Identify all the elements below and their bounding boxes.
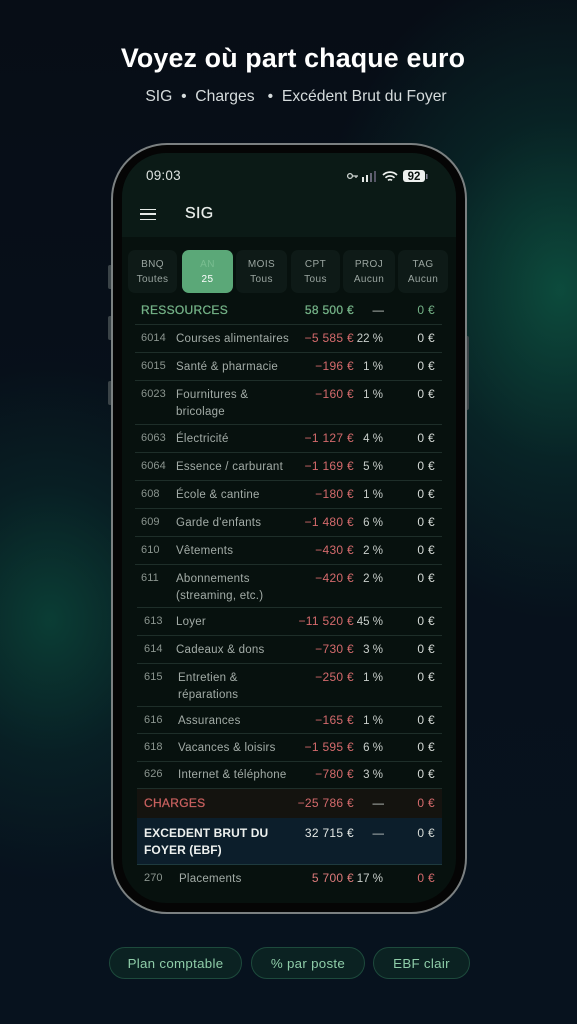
row 616: 616	[144, 714, 163, 726]
row 613	[144, 614, 435, 628]
resources row: 0 €	[417, 303, 435, 317]
row 614: Cadeaux & dons	[176, 644, 265, 656]
chip: EBF clair	[373, 947, 470, 979]
EBF values: EXCEDENT BRUT DU	[144, 826, 268, 840]
row 626: 626	[144, 768, 163, 780]
row 6023: 1 %	[363, 389, 383, 401]
row 6064: 6064	[141, 460, 166, 472]
app title: SIG	[185, 205, 213, 222]
row 6063	[141, 431, 435, 445]
charges values	[144, 796, 435, 810]
row 6063: 4 %	[363, 433, 383, 445]
row 270: 270	[144, 872, 163, 884]
row 6015	[141, 359, 435, 373]
status bar time: 09:03	[146, 168, 181, 183]
tab AN active: AN	[200, 259, 215, 270]
resources row: RESSOURCES	[141, 303, 228, 317]
row 611: −420 €	[315, 571, 354, 585]
row 6063: −1 127 €	[305, 431, 354, 445]
row 6015: 6015	[141, 360, 166, 372]
resources row	[141, 303, 435, 317]
row 608: 1 %	[363, 489, 383, 501]
EBF values	[144, 826, 435, 857]
charges row	[137, 789, 442, 818]
row 616: 1 %	[363, 715, 383, 727]
row 6064: 0 €	[417, 459, 435, 473]
table rows	[135, 324, 442, 789]
row 6023: −160 €	[315, 387, 354, 401]
row 6064: 5 %	[363, 461, 383, 473]
row 611: 0 €	[417, 571, 435, 585]
row 613: 45 %	[357, 616, 383, 628]
row 609: 6 %	[363, 517, 383, 529]
row 609: Garde d'enfants	[176, 517, 261, 529]
status bar icons	[347, 170, 428, 183]
row 270: 17 %	[357, 873, 383, 885]
row 6014: Courses alimentaires	[176, 333, 289, 345]
row 6064	[141, 459, 435, 473]
row 609: 0 €	[417, 515, 435, 529]
row 608: École & cantine	[176, 489, 260, 501]
row 610: 610	[141, 544, 160, 556]
row 613: Loyer	[176, 616, 206, 628]
EBF values: 32 715 €	[305, 826, 354, 840]
EBF band	[137, 818, 442, 865]
app header	[122, 153, 456, 237]
row 6014: −5 585 €	[305, 331, 354, 345]
row 613: −11 520 €	[298, 614, 354, 628]
row 6063: Électricité	[176, 433, 229, 445]
tab CPT: CPT	[305, 259, 326, 270]
row 613: 0 €	[417, 614, 435, 628]
row 618	[144, 740, 435, 754]
row 6015: 0 €	[417, 359, 435, 373]
row 611	[141, 571, 435, 602]
row 6064: Essence / carburant	[176, 461, 283, 473]
tab MOIS: MOIS	[248, 259, 275, 270]
row 610: −430 €	[315, 543, 354, 557]
tab TAG	[398, 250, 448, 293]
row 626: 0 €	[417, 767, 435, 781]
row 615: −250 €	[315, 670, 354, 684]
filter tabs	[128, 250, 448, 293]
row 616: −165 €	[315, 713, 354, 727]
row 616: 0 €	[417, 713, 435, 727]
row 608: 0 €	[417, 487, 435, 501]
row 611: Abonnements	[176, 573, 250, 585]
row 616	[144, 713, 435, 727]
status bar icons: 92	[408, 171, 420, 183]
chip: plan comptable: Plan comptable	[128, 956, 223, 971]
row 615: 0 €	[417, 670, 435, 684]
tab BNQ	[128, 250, 177, 293]
phone mockup	[108, 143, 469, 914]
resources row: 58 500 €	[305, 303, 354, 317]
row 6014	[141, 331, 435, 345]
row 6015: 1 %	[363, 361, 383, 373]
row 610	[141, 543, 435, 557]
row 6023: 0 €	[417, 387, 435, 401]
row 615: 1 %	[363, 672, 383, 684]
row 615: Entretien &	[178, 672, 238, 684]
charges values: CHARGES	[144, 796, 205, 810]
row 270	[144, 871, 435, 885]
EBF values: —	[372, 828, 384, 840]
row 6064: −1 169 €	[305, 459, 354, 473]
row 609: 609	[141, 516, 160, 528]
row 615	[144, 670, 435, 700]
row 626: Internet & téléphone	[178, 769, 287, 781]
tab CPT	[291, 250, 340, 293]
row 610: 2 %	[363, 545, 383, 557]
phone screen: FOYER (EBF)	[144, 843, 222, 857]
phone screen	[122, 153, 456, 903]
row 618: 618	[144, 741, 163, 753]
row 615: 615	[144, 671, 163, 683]
tab BNQ: BNQ	[141, 259, 164, 270]
table rows: bricolage	[176, 406, 225, 418]
row 618: 6 %	[363, 742, 383, 754]
menu icon	[140, 209, 156, 220]
row 614: −730 €	[315, 642, 354, 656]
charges values: —	[372, 798, 384, 810]
subtitle: SIG • Charges • Excédent Brut du Foyer	[145, 88, 447, 105]
row 610: 0 €	[417, 543, 435, 557]
row 6063: 6063	[141, 432, 166, 444]
row 610: Vêtements	[176, 545, 233, 557]
row 616: Assurances	[178, 715, 241, 727]
resources row: —	[372, 305, 384, 317]
power button	[466, 336, 469, 410]
row 618: Vacances & loisirs	[178, 742, 276, 754]
chip: % par poste: % par poste	[271, 956, 345, 971]
table rows: (streaming, etc.)	[176, 590, 263, 602]
tab BNQ: Toutes	[137, 274, 168, 285]
tab AN active	[182, 250, 233, 293]
tab PROJ: PROJ	[355, 259, 383, 270]
row 270: Placements	[179, 873, 242, 885]
row 6015: Santé & pharmacie	[176, 361, 278, 373]
tab MOIS: Tous	[250, 274, 273, 285]
title: Voyez où part chaque euro	[121, 43, 465, 73]
row 608	[141, 487, 435, 501]
phone frame	[111, 143, 467, 914]
row 618: −1 595 €	[305, 740, 354, 754]
row 6023: 6023	[141, 388, 166, 400]
row 6014: 22 %	[357, 333, 383, 345]
chip: EBF clair: EBF clair	[393, 956, 450, 971]
row 608: 608	[141, 488, 160, 500]
row 614: 0 €	[417, 642, 435, 656]
charges values: −25 786 €	[298, 796, 354, 810]
row 6023: Fournitures &	[176, 389, 248, 401]
row 626	[144, 767, 435, 781]
charges values: 0 €	[417, 796, 435, 810]
EBF values: 0 €	[417, 826, 435, 840]
row 626: 3 %	[363, 769, 383, 781]
chip: plan comptable	[109, 947, 242, 979]
tab TAG: Aucun	[408, 274, 438, 285]
row 614: 614	[144, 643, 163, 655]
tab PROJ: Aucun	[354, 274, 384, 285]
row 270: 0 €	[417, 871, 435, 885]
row 611: 611	[141, 572, 159, 584]
row 6014: 0 €	[417, 331, 435, 345]
row 614	[144, 642, 435, 656]
side buttons	[108, 265, 111, 289]
tab CPT: Tous	[304, 274, 327, 285]
row 6015: −196 €	[315, 359, 354, 373]
row 618: 0 €	[417, 740, 435, 754]
tab MOIS	[236, 250, 287, 293]
row 626: −780 €	[315, 767, 354, 781]
row 613: 613	[144, 615, 163, 627]
row 270: 5 700 €	[312, 871, 354, 885]
tab PROJ	[343, 250, 395, 293]
row 609: −1 480 €	[305, 515, 354, 529]
chip: % par poste	[251, 947, 365, 979]
tab TAG: TAG	[412, 259, 434, 270]
row 609	[141, 515, 435, 529]
tab AN active: 25	[202, 274, 213, 285]
row 6014: 6014	[141, 332, 166, 344]
row 611: 2 %	[363, 573, 383, 585]
row 6063: 0 €	[417, 431, 435, 445]
row 614: 3 %	[363, 644, 383, 656]
table rows: réparations	[178, 688, 238, 700]
row 6023	[141, 387, 435, 418]
row 608: −180 €	[315, 487, 354, 501]
